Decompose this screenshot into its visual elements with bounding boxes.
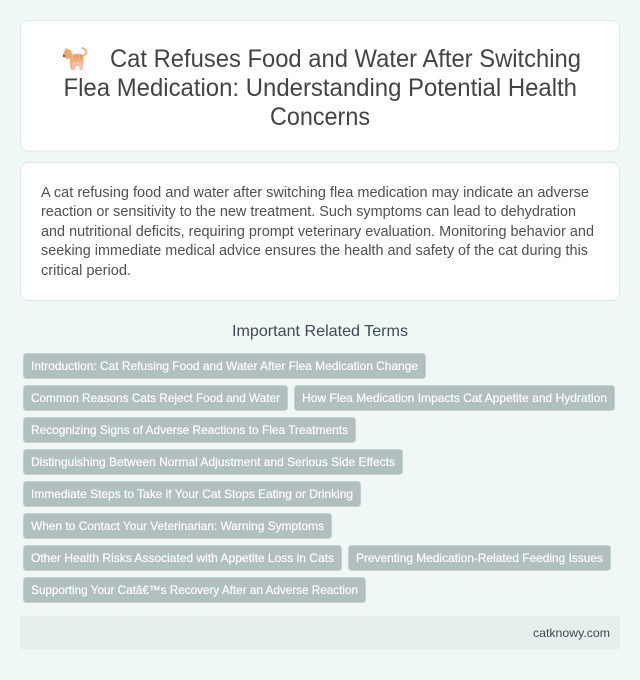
title bbox=[64, 45, 581, 131]
term chip 6 bbox=[24, 482, 360, 506]
panel: summary card bbox=[20, 162, 620, 300]
term chip 3: How Flea Medication Impacts Cat Appetite and Hydration bbox=[302, 391, 607, 405]
term chip 10: Supporting Your Catâ€™s Recovery After an Adverse Reaction bbox=[31, 583, 358, 597]
term chip 1: Introduction: Cat Refusing Food and Water After Flea Medication Change bbox=[31, 359, 418, 373]
footer bar bbox=[20, 616, 620, 650]
title: Flea Medication: Understanding Potential Health bbox=[64, 74, 577, 102]
term chip 7 bbox=[24, 514, 332, 538]
term chip 8: Other Health Risks Associated with Appetite Loss in Cats bbox=[31, 551, 334, 565]
summary text: A cat refusing food and water after switching flea medication may indicate an adverse bbox=[41, 185, 589, 201]
term chip 5 bbox=[24, 450, 402, 474]
panel: title card bbox=[20, 20, 620, 151]
term chip 2: Common Reasons Cats Reject Food and Water bbox=[31, 391, 280, 405]
term chip 5: Distinguishing Between Normal Adjustment and Serious Side Effects bbox=[31, 455, 395, 469]
icon: cat bbox=[63, 48, 86, 70]
footer source: catknowy.com bbox=[533, 626, 610, 640]
term chip 10 bbox=[24, 578, 366, 602]
term chip 8 bbox=[24, 546, 342, 570]
term chip 4: Recognizing Signs of Adverse Reactions to Flea Treatments bbox=[31, 423, 348, 437]
summary text: and nutritional deficits, requiring prompt veterinary evaluation. Monitoring behavior and bbox=[41, 224, 594, 240]
summary text: seeking immediate medical advice ensures the health and safety of the cat during this bbox=[41, 243, 588, 259]
heading: important related terms: Important Related Terms bbox=[232, 323, 408, 340]
term chip 9 bbox=[348, 546, 610, 570]
term chip 2 bbox=[24, 386, 288, 410]
term chip 1 bbox=[24, 354, 426, 378]
term chip 4 bbox=[24, 418, 356, 442]
related terms list bbox=[24, 354, 614, 602]
summary text bbox=[41, 185, 594, 279]
summary text: critical period. bbox=[41, 263, 131, 279]
term chip 9: Preventing Medication-Related Feeding Issues bbox=[356, 551, 603, 565]
title: Cat Refuses Food and Water After Switching bbox=[110, 45, 581, 73]
summary text: reaction or sensitivity to the new treatment. Such symptoms can lead to dehydration bbox=[41, 204, 576, 220]
title: Concerns bbox=[270, 103, 370, 131]
term chip 7: When to Contact Your Veterinarian: Warning Symptoms bbox=[31, 519, 324, 533]
term chip 3 bbox=[294, 386, 614, 410]
term chip 6: Immediate Steps to Take if Your Cat Stops Eating or Drinking bbox=[31, 487, 353, 501]
